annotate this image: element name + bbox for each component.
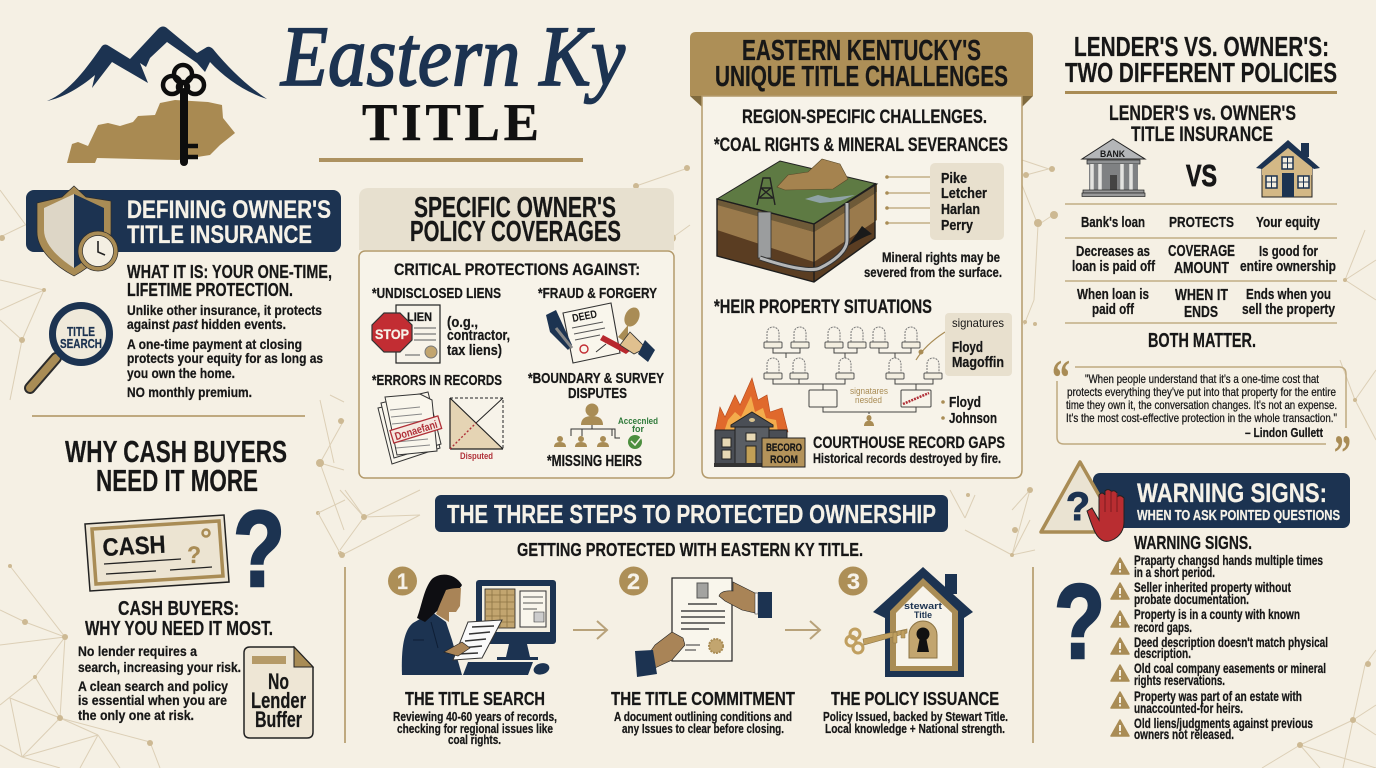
heading: POLICY COVERAGES [410, 216, 621, 248]
callout: quote: “ [1052, 349, 1070, 405]
comparison table: Is good for [1259, 243, 1318, 260]
text block: cash buyers: No lender requires a [78, 643, 197, 659]
icon: no lender buffer document: Lender [251, 688, 306, 713]
text block: what it is: against past hidden events. [127, 316, 286, 332]
icon: stop sign and lien document: STOP [375, 326, 409, 342]
comparison table: PROTECTS [1169, 214, 1234, 231]
family tree diagram: nesded [855, 395, 882, 405]
comparison table: WHEN IT [1175, 287, 1228, 304]
signatures callout: Floyd [952, 339, 983, 356]
text block: cash buyers: the only one at risk. [78, 707, 194, 723]
badge 1 [388, 566, 417, 596]
icon: house with keyhole and key [846, 567, 973, 677]
comparison table: Decreases as [1076, 243, 1150, 260]
text block: cash buyers: is essential when you are [78, 692, 227, 708]
warning list: unaccounted-for heirs. [1134, 701, 1243, 716]
comparison table: Your equity [1256, 214, 1321, 231]
county label box: Harlan [941, 201, 980, 218]
heading: SPECIFIC OWNER'S [414, 192, 616, 224]
family tree diagram: signatares [850, 386, 888, 396]
coverage: boundary and survey disputes, missing heirs: DISPUTES [568, 385, 627, 402]
icon: disputed boundary: Disputed [460, 451, 493, 462]
step text [823, 689, 1008, 736]
comparison table: AMOUNT [1174, 260, 1229, 277]
icon: bank [1082, 139, 1145, 196]
panel: defining owner's title insurance [26, 186, 341, 400]
warning list: Property is in a county with known [1134, 607, 1300, 622]
comparison table: Ends when you [1246, 286, 1331, 303]
heading [65, 434, 287, 498]
icon: shield and clock [37, 186, 118, 276]
badge 2 [619, 566, 648, 596]
heading: UNIQUE TITLE CHALLENGES [715, 61, 1008, 93]
comparison table: COVERAGE [1168, 243, 1235, 260]
callout: quote: ” [1334, 424, 1351, 480]
warning list: owners not released. [1134, 727, 1234, 742]
warning list: probate documentation. [1134, 592, 1249, 607]
county label box [885, 163, 1004, 240]
arrow [573, 621, 607, 639]
icon: key [163, 65, 204, 162]
banner: THE THREE STEPS TO PROTECTED OWNERSHIP [447, 499, 936, 529]
icon: accepted check [618, 416, 658, 449]
comparison table: paid off [1092, 301, 1135, 318]
icon: mountains [47, 26, 267, 101]
county label box: Pike [941, 170, 967, 187]
coverage: undisclosed liens: *UNDISCLOSED LIENS [372, 285, 501, 302]
heading: WHY CASH BUYERS [65, 434, 287, 469]
step text: coal rights. [448, 733, 501, 747]
icon: stop sign and lien document [372, 305, 440, 363]
icon: house with keyhole and key: stewart [904, 601, 943, 612]
coverage: errors in records [372, 372, 503, 464]
step text: THE TITLE COMMITMENT [611, 689, 795, 709]
heading: NEED IT MORE [96, 463, 258, 498]
panel: eastern kentucky's unique title challenges: REGION-SPECIFIC CHALLENGES. [742, 107, 987, 128]
heading [410, 192, 621, 248]
icon: warning triangle with stop hand: ? [1066, 485, 1090, 529]
text block: what it is: protects your equity for as long as [127, 350, 323, 366]
comparison table: entire ownership [1240, 258, 1336, 275]
badge 3: 3 [847, 569, 860, 594]
subheading: TITLE INSURANCE [1131, 123, 1273, 146]
icon: question mark: ? [1054, 563, 1105, 681]
text block: cash buyers [78, 598, 273, 723]
panel: warning signs [1041, 462, 1350, 742]
icon: magnifier title search: TITLE [67, 324, 95, 339]
step 2: title commitment [611, 566, 795, 736]
text block: what it is: NO monthly premium. [127, 384, 252, 400]
icon: magnifier title search [30, 306, 110, 388]
icon: document stack: Donaefani [393, 419, 439, 443]
comparison table: sell the property [1242, 301, 1336, 318]
vs label: VS [1186, 158, 1217, 193]
title: TITLE [362, 94, 539, 152]
icon: warning triangle with stop hand [1041, 462, 1124, 541]
banner [435, 495, 948, 532]
coverage: boundary and survey disputes, missing heirs: *BOUNDARY & SURVEY [528, 370, 664, 387]
signatures callout [916, 313, 1012, 376]
icon: cash check: CASH [102, 531, 166, 562]
icon: burning courthouse: ROOM [770, 454, 798, 466]
signatures callout: signatures [952, 316, 1004, 330]
step text: any Issues to clear before closing. [622, 722, 784, 736]
icon: accepted check: Accecnled [618, 416, 658, 426]
text block: cash buyers: search, increasing your risk. [78, 659, 241, 675]
icon: woman at computer [402, 575, 556, 676]
warning list: WARNING SIGNS. [1134, 533, 1252, 553]
comparison table: loan is paid off [1072, 258, 1156, 275]
comparison table [1065, 204, 1337, 323]
callout: quote: "When people understand that it's a one-time cost that [1085, 372, 1320, 386]
coverage: undisclosed liens: contractor, [447, 327, 510, 344]
coverage: fraud and forgery [538, 285, 657, 363]
subheading [1109, 102, 1296, 146]
subheading: GETTING PROTECTED WITH EASTERN KY TITLE. [517, 540, 863, 560]
coverage: errors in records: *ERRORS IN RECORDS [372, 372, 502, 389]
icon: house with keyhole and key: Title [914, 610, 932, 621]
step text: checking for regional issues like [397, 722, 553, 736]
panel: specific owner's policy coverages [359, 188, 674, 478]
step text [393, 689, 557, 747]
panel: eastern kentucky's unique title challenges: *COAL RIGHTS & MINERAL SEVERANCES [714, 135, 1008, 156]
heading [127, 196, 331, 249]
panel: lender's vs owner's [1052, 31, 1351, 480]
warning list: rights reservations. [1134, 673, 1225, 688]
text block: mineral rights: severed from the surface. [864, 264, 1002, 280]
subheading: CRITICAL PROTECTIONS AGAINST: [394, 260, 640, 279]
step text: Local knowledge + National strength. [825, 722, 1005, 736]
warning list: description. [1134, 646, 1191, 661]
warning list: Seller inherited property without [1134, 580, 1291, 595]
step text: THE TITLE SEARCH [405, 689, 545, 709]
coverage: boundary and survey disputes, missing heirs [528, 370, 664, 470]
county bullet list: Johnson [949, 410, 997, 427]
text block: cash buyers: A clean search and policy [78, 678, 228, 694]
icon: cash check [85, 515, 229, 591]
text block: courthouse record gaps: Historical records destroyed by fire. [813, 450, 1001, 466]
badge 3 [838, 566, 868, 596]
coverage: boundary and survey disputes, missing heirs: *MISSING HEIRS [547, 453, 642, 470]
icon: house [1256, 140, 1320, 197]
icon: burning courthouse: BECORO [766, 442, 802, 454]
logo: mountains, key and Kentucky [47, 26, 267, 163]
icon: no lender buffer document: Buffer [255, 707, 302, 732]
heading [715, 35, 1008, 93]
warning list: Old liens/judgments against previous [1134, 716, 1313, 731]
text block: what it is: you own the home. [127, 365, 235, 381]
family tree diagram [764, 327, 942, 426]
warning list: Property was part of an estate with [1134, 689, 1302, 704]
comparison table: When loan is [1077, 286, 1149, 303]
heading: TITLE INSURANCE [127, 221, 312, 249]
icon: question mark: ? [233, 488, 285, 609]
text block: cash buyers: CASH BUYERS: [118, 598, 239, 620]
county bullet list: Floyd [949, 394, 981, 411]
text block: what it is [127, 262, 332, 400]
panel: three steps to protected ownership [344, 495, 1034, 747]
coverage: undisclosed liens [372, 285, 510, 363]
arrow [785, 621, 820, 639]
warning list [1111, 533, 1328, 742]
callout: quote [1052, 349, 1351, 480]
badge 2: 2 [627, 569, 640, 594]
heading: EASTERN KENTUCKY'S [742, 35, 981, 67]
county label box: Letcher [941, 185, 987, 202]
text block: courthouse record gaps: COURTHOUSE RECORD GAPS [813, 433, 1005, 452]
banner: WARNING SIGNS: [1137, 478, 1327, 508]
comparison table: Bank's loan [1081, 214, 1145, 231]
coverage: undisclosed liens: tax liens) [447, 342, 502, 359]
icon: coal geological block [717, 159, 877, 282]
icon: heirs tree [554, 404, 620, 447]
step text: A document outlining conditions and [614, 710, 792, 724]
county label box: Perry [941, 217, 974, 234]
badge 1: 1 [397, 569, 408, 594]
comparison table: ENDS [1184, 304, 1218, 321]
text block: mineral rights [864, 249, 1002, 280]
panel: eastern kentucky's unique title challenges: *HEIR PROPERTY SITUATIONS [714, 297, 932, 318]
text block: what it is: LIFETIME PROTECTION. [127, 280, 293, 300]
text block: what it is: WHAT IT IS: YOUR ONE-TIME, [127, 262, 332, 282]
title [279, 8, 626, 162]
signatures callout: Magoffin [952, 354, 1004, 371]
icon: document handoff [635, 578, 772, 677]
icon: no lender buffer document [244, 647, 313, 738]
step 1: title search [388, 566, 557, 747]
text block: courthouse record gaps [813, 433, 1005, 466]
icon: bank: BANK [1100, 149, 1125, 159]
coverage: undisclosed liens: (o.g., [447, 314, 478, 331]
icon: deed with pen and stamp: DEED [571, 308, 598, 325]
text block: mineral rights: Mineral rights may be [882, 249, 1000, 265]
icon: stop sign and lien document: LIEN [407, 310, 432, 324]
step text [611, 689, 795, 736]
text block: what it is: A one-time payment at closing [127, 336, 302, 352]
banner [1093, 473, 1350, 528]
text block: what it is: Unlike other insurance, it protects [127, 302, 322, 318]
icon: accepted check: for [632, 424, 644, 434]
both matter: BOTH MATTER. [1148, 330, 1256, 352]
icon: no lender buffer document: No [268, 669, 289, 694]
text block: cash buyers: WHY YOU NEED IT MOST. [85, 618, 273, 640]
panel: eastern kentucky's unique title challenges [690, 32, 1033, 478]
county bullet list [941, 394, 997, 427]
heading: DEFINING OWNER'S [127, 196, 331, 224]
step text: Policy Issued, backed by Stewart Title. [823, 710, 1008, 724]
step text: THE POLICY ISSUANCE [831, 689, 999, 709]
icon: magnifier title search: SEARCH [60, 336, 102, 351]
step 3: policy issuance [823, 566, 1008, 736]
heading [1065, 31, 1337, 94]
panel: why cash buyers [65, 434, 313, 738]
coverage: fraud and forgery: *FRAUD & FORGERY [538, 285, 657, 302]
step text: Reviewing 40-60 years of records, [393, 710, 557, 724]
subheading: LENDER'S vs. OWNER'S [1109, 102, 1296, 125]
icon: cash check: ? [187, 542, 201, 569]
icon: Kentucky map [67, 100, 235, 163]
title: Eastern Ky [279, 8, 626, 104]
callout: quote: – Lindon Gullett [1245, 425, 1324, 440]
warning list: in a short period. [1134, 565, 1215, 580]
warning list: record gaps. [1134, 620, 1192, 635]
icon: burning courthouse [714, 378, 805, 467]
